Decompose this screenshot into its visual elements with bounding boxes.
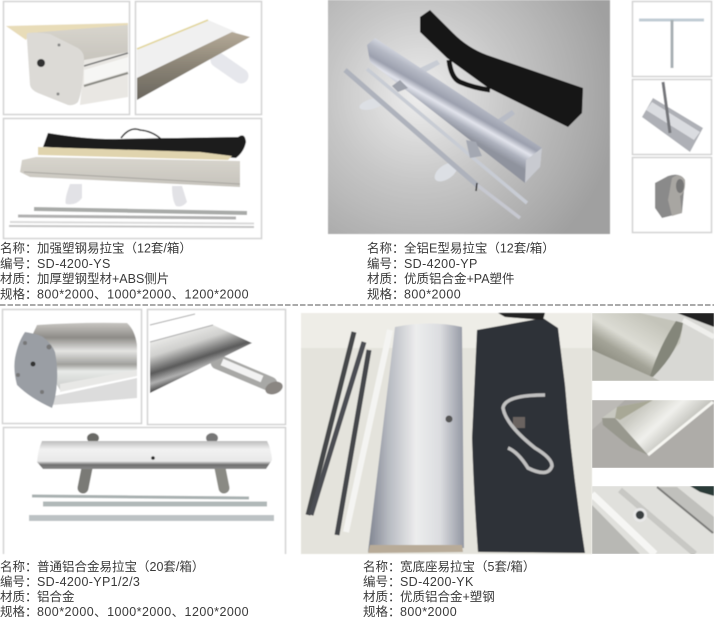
text block: SD-4200-YP specifications: 优质铝合金+PA塑件 [404,271,515,286]
text block: SD-4200-YK specifications: 材质： [363,590,401,604]
icon: dark bag with handle [472,313,585,553]
panel: SD-4200-YS full kit photo [4,118,262,238]
panel: SD-4200-YP main photo [328,0,610,234]
text block: SD-4200-YP1/2/3 specifications: 普通铝合金易拉宝（20套/箱） [37,559,204,574]
panel: YK roller side photo [592,400,714,468]
icon: black bag with strap [420,10,583,127]
text block: SD-4200-YP specifications: SD-4200-YP [404,257,478,271]
panel: SD-4200-YP1/2/3 end plate photo [2,310,142,424]
text block: SD-4200-YS specifications [0,240,249,302]
text block: SD-4200-YS specifications: 编号： [0,257,38,271]
text block: SD-4200-YK specifications: 宽底座易拉宝（5套/箱） [400,559,535,574]
text block: SD-4200-YS specifications: 加厚塑钢型材+ABS侧片 [37,271,169,286]
text block: SD-4200-YK specifications: 编号： [363,575,401,589]
text block: SD-4200-YP1/2/3 specifications: SD-4200-YP1/2/3 [37,575,140,589]
text block: SD-4200-YP1/2/3 specifications: 材质： [0,590,38,604]
text block: SD-4200-YS specifications: SD-4200-YS [37,257,111,271]
text block: SD-4200-YK specifications [363,559,535,617]
text block: SD-4200-YP1/2/3 specifications: 编号： [0,575,38,589]
text block: SD-4200-YK specifications: 优质铝合金+塑钢 [400,589,495,604]
text block: SD-4200-YS specifications: 名称： [0,242,38,256]
text block: SD-4200-YP specifications: 规格： [367,288,405,302]
panel: end clip photo [632,158,712,232]
text block: SD-4200-YS specifications: 800*2000、1000*2000、1200*2000 [37,288,249,302]
text block: SD-4200-YP specifications: 全铝E型易拉宝（12套/箱） [404,240,555,256]
panel: T-shaped pole photo [632,2,712,76]
text block: SD-4200-YS specifications: 规格： [0,288,38,302]
text block: SD-4200-YP specifications: 名称： [367,242,405,256]
text block: SD-4200-YK specifications: SD-4200-YK [400,575,474,589]
panel: SD-4200-YP1/2/3 base photo [148,310,286,424]
icon: black carry bag [43,129,246,158]
text block: SD-4200-YP specifications: 材质： [367,272,405,286]
text block: SD-4200-YP1/2/3 specifications: 名称： [0,560,38,574]
text block: SD-4200-YP1/2/3 specifications: 铝合金 [37,589,75,604]
panel: pole in base photo [632,80,712,154]
text block: SD-4200-YS specifications: 材质： [0,272,38,286]
panel: SD-4200-YS end cap photo [4,2,130,114]
text block: SD-4200-YP specifications [367,240,555,302]
text block: SD-4200-YP1/2/3 specifications [0,559,249,617]
text block: SD-4200-YP specifications: 编号： [367,257,405,271]
text block: SD-4200-YP specifications: 800*2000 [404,288,461,302]
panel: YK end cap photo [592,313,714,381]
panel: SD-4200-YP1/2/3 full kit photo [4,428,286,554]
panel: SD-4200-YS base photo [136,2,262,114]
text block: SD-4200-YK specifications: 名称： [363,560,401,574]
text block: SD-4200-YS specifications: 加强塑钢易拉宝（12套/箱） [37,240,192,256]
panel: YK roller hole photo [592,486,714,554]
panel: SD-4200-YK main photo [301,313,592,554]
